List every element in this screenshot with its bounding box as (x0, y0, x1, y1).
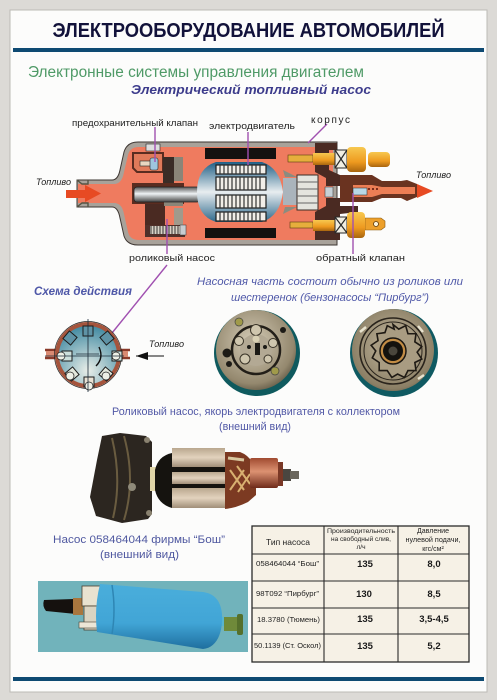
table values (356, 559, 450, 652)
inlet fitting (77, 180, 88, 207)
table values: 135 (357, 559, 374, 570)
label: fuel: Топливо (149, 339, 184, 350)
commutator (283, 170, 333, 214)
roller axes (57, 352, 120, 390)
table values: 8,5 (427, 589, 441, 600)
table header: Тип насоса (266, 537, 310, 547)
table values: 135 (357, 614, 374, 625)
heading: operation scheme: Схема действия (34, 286, 132, 298)
caption: Bosch pump: Насос 058464044 фирмы “Бош” (53, 534, 225, 546)
label: inlet fuel: Топливо (36, 177, 71, 188)
table header: нулевой подачи, (406, 535, 460, 544)
outlet fitting (224, 617, 240, 631)
shaft (134, 187, 200, 202)
rollers (62, 326, 122, 387)
label: housing: корпус (311, 115, 350, 126)
pump cutaway diagram (36, 115, 451, 333)
shaft bearing (150, 467, 160, 491)
top rule (13, 48, 484, 52)
armature core (155, 453, 230, 508)
table rows: 50.1139 (Ст. Оскол) (254, 641, 321, 650)
caption: Bosch pump: (внешний вид) (100, 549, 179, 561)
photo: armature (90, 433, 299, 523)
gear (371, 325, 422, 377)
bottom rule (13, 677, 484, 681)
shaft end (283, 469, 291, 481)
centre lines (45, 319, 124, 392)
photo: Bosch pump (38, 581, 248, 652)
table header: Давление (417, 526, 449, 535)
rotor (197, 162, 283, 222)
spring (145, 225, 186, 237)
label: outlet fuel: Топливо (416, 170, 451, 181)
table header: л/ч (356, 544, 366, 551)
table values: 5,2 (427, 641, 441, 652)
right end cap (315, 143, 358, 240)
table rows: 18.3780 (Тюмень) (257, 615, 320, 624)
table values: 135 (357, 641, 374, 652)
note: pump part: Насосная часть состоит обычно из роликов или (197, 276, 463, 288)
roller pump block (132, 157, 184, 228)
windings (225, 452, 256, 509)
subheading: Электрический топливный насос (131, 83, 371, 97)
relief valve (133, 144, 163, 172)
roller pump scheme (45, 319, 184, 392)
commutator (250, 458, 278, 488)
section heading: Электронные системы управления двигателем (28, 64, 364, 81)
inlet cap (43, 599, 76, 614)
table rows (254, 559, 321, 650)
caption: roller pump and armature: Роликовый насос, якорь электродвигателя с коллектором (112, 406, 400, 418)
top terminal (288, 147, 390, 172)
inlet fuel arrow (66, 185, 101, 202)
table rows: 058464044 “Бош” (256, 559, 319, 568)
table header (266, 526, 460, 553)
inlet and outlet pipes (45, 350, 130, 358)
outlet neck (215, 617, 227, 626)
outlet fuel arrow (417, 184, 433, 198)
note: pump part (197, 276, 463, 304)
magnets (205, 148, 276, 159)
table header: кгс/см² (422, 546, 444, 553)
photo: pump disc with gear (350, 309, 438, 397)
table header: Производительность (327, 528, 396, 535)
note: pump part: шестеренок (бензонасосы “Пирбург”) (231, 292, 429, 304)
photo: pump disc with rollers (214, 310, 300, 396)
table values: 8,0 (427, 559, 441, 570)
leader lines (112, 124, 353, 333)
bottom terminal (290, 212, 385, 238)
label: roller pump: роликовый насос (129, 253, 215, 264)
rotor circle (57, 324, 119, 386)
armature windings (216, 165, 266, 221)
table values: 130 (356, 589, 372, 600)
table header: на свободный слив, (331, 535, 391, 543)
table values: 3,5-4,5 (419, 614, 450, 625)
pump housing (77, 142, 337, 245)
label: electric motor: электродвигатель (209, 121, 295, 132)
table rows: 98T092 “Пирбург” (256, 589, 319, 598)
caption: roller pump and armature (112, 406, 400, 433)
terminals (82, 586, 100, 606)
caption: Bosch pump (53, 534, 225, 561)
outlet nozzle (340, 175, 417, 202)
data table (252, 526, 469, 662)
fuel arrow (136, 355, 164, 357)
label: relief valve: предохранительный клапан (72, 118, 198, 129)
caption: roller pump and armature: (внешний вид) (219, 421, 291, 433)
title: ЭЛЕКТРООБОРУДОВАНИЕ АВТОМОБИЛЕЙ (52, 18, 444, 42)
label: check valve: обратный клапан (316, 253, 405, 264)
interior fuel cavity (78, 147, 333, 240)
pump head (90, 433, 152, 523)
pump body (96, 584, 222, 649)
